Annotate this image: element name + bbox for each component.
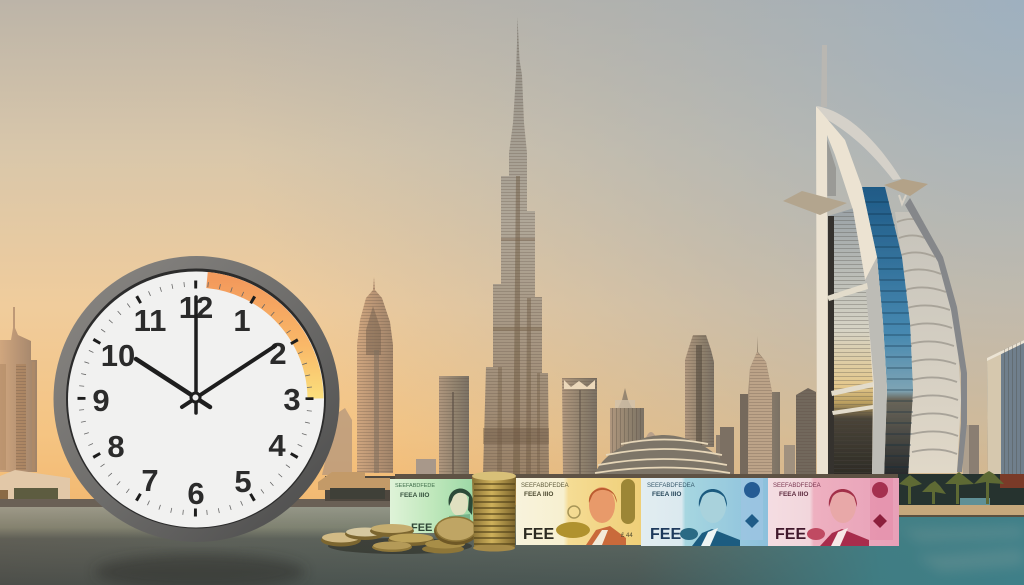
clock numerals: 4 <box>268 428 286 463</box>
floor bands <box>827 283 868 301</box>
back arch <box>817 106 901 180</box>
mast <box>821 45 827 107</box>
banknote: pink: FEEA IIIO <box>779 491 808 498</box>
emblem <box>741 478 763 540</box>
blue glass column <box>862 187 913 478</box>
building: glass dome <box>594 435 730 477</box>
clock numerals: 8 <box>107 429 125 464</box>
building: ornate tower <box>357 277 393 473</box>
right curve edge <box>905 198 967 472</box>
clock <box>54 256 340 585</box>
banknote: yellow <box>516 478 641 545</box>
banknote: blue: FEE <box>650 526 681 543</box>
building: low waterfront left <box>0 470 70 503</box>
building: Burj Al Arab <box>783 45 967 478</box>
portrait <box>586 487 626 545</box>
clock face <box>68 272 324 528</box>
building: crown-top tower <box>562 378 597 475</box>
coins: loose pile <box>321 517 478 554</box>
banknote: green: FEEA IIIO <box>400 492 429 499</box>
building: rectangular tower <box>439 376 469 475</box>
main white sail frame <box>816 106 887 478</box>
clock numerals: 5 <box>234 464 252 499</box>
banknote: yellow: SEEFABDFEDEA <box>521 483 569 489</box>
waterfront: promenade and palms <box>898 471 1024 517</box>
clock numerals: 7 <box>141 463 159 498</box>
building: glass tower at right edge <box>987 340 1024 476</box>
highlighted orange arc <box>207 280 316 398</box>
clock numerals: 12 <box>179 290 213 325</box>
building: haze dome behind <box>645 432 657 440</box>
clock numerals: 11 <box>134 303 166 338</box>
right helipad <box>884 179 928 196</box>
banknote: pink: FEE <box>775 526 806 543</box>
minute ticks <box>81 284 310 513</box>
clock numerals: 10 <box>101 338 135 373</box>
banknote: blue <box>641 478 768 546</box>
building: far left tower <box>0 307 37 472</box>
building: towers right of Burj Al Arab <box>963 425 979 475</box>
banknote: blue: SEEFABDFEDEA <box>647 483 695 489</box>
banknote: yellow: FEE <box>523 526 554 543</box>
building: Burj Khalifa <box>483 17 549 475</box>
left helipad wing <box>783 191 847 215</box>
banknote: blue: FEEA IIIO <box>652 491 681 498</box>
building: short tower <box>716 427 734 475</box>
hour ticks <box>82 284 310 512</box>
clock rim <box>54 256 340 542</box>
side glass panels <box>828 208 874 478</box>
water: creek surface <box>0 505 1024 585</box>
building: haze towers left of clock <box>322 408 352 475</box>
banknote: yellow: FEEA IIIO <box>524 491 553 498</box>
clock numerals: 9 <box>92 383 110 418</box>
banknote: yellow: £ 44 <box>621 533 633 539</box>
clock numerals: 1 <box>233 303 251 338</box>
clock numerals: 2 <box>269 336 287 371</box>
reflection <box>95 554 305 585</box>
building: grey tower <box>784 388 816 476</box>
portrait <box>820 489 869 546</box>
clock numerals <box>92 290 301 511</box>
shadow column <box>824 130 836 196</box>
portrait <box>449 489 473 522</box>
banknote: green <box>390 479 474 534</box>
waterfront: shoreline buildings <box>0 472 900 507</box>
rear rib sail <box>895 212 961 473</box>
icon: palm trees <box>899 471 1004 504</box>
banknote: green: SEEFABDFEDE <box>395 483 435 489</box>
building: stepped tower <box>685 335 714 447</box>
building: curved spire tower <box>740 336 780 476</box>
clock numerals: 6 <box>187 476 205 511</box>
building: low block <box>416 459 436 475</box>
banknote: pink: SEEFABDFEDEA <box>773 483 821 489</box>
portrait <box>692 489 740 546</box>
emblem <box>556 522 590 538</box>
banknote: pink <box>768 478 899 546</box>
clock numerals: 3 <box>283 382 301 417</box>
coins: tall stack <box>472 472 516 552</box>
clock hands <box>136 297 275 413</box>
emblem <box>870 478 893 540</box>
banknote: green: FEE <box>411 522 432 534</box>
building: star-top tower <box>610 388 644 470</box>
